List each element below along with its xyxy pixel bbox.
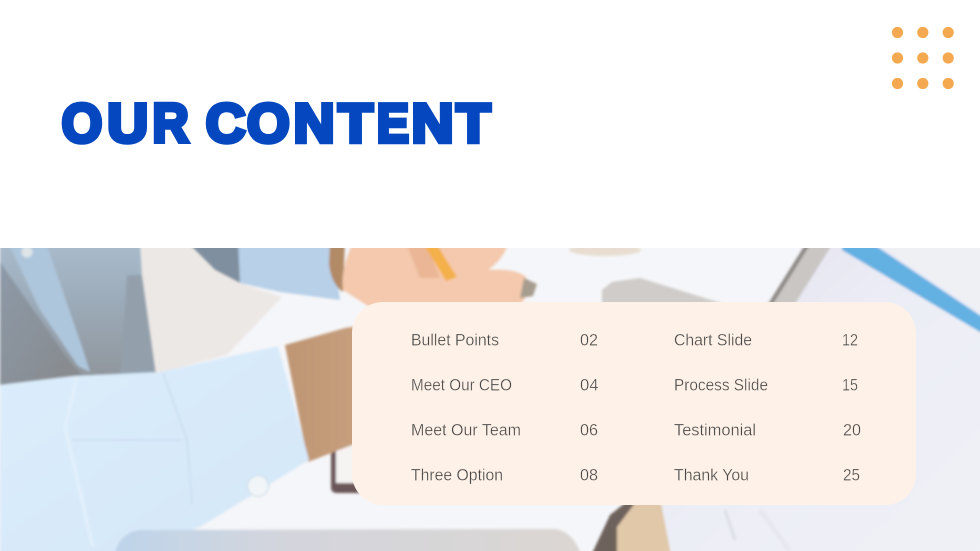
panel: contents list (352, 302, 916, 505)
column: right entries: Thank You (674, 466, 749, 484)
photo: hands at a desk (0, 240, 980, 551)
column: left entries (411, 332, 598, 484)
title: R (152, 93, 189, 154)
title: O (247, 92, 290, 154)
title: T (456, 92, 491, 154)
title: O (62, 93, 102, 154)
column: right entries (674, 332, 861, 484)
column: left entries: 04 (580, 376, 598, 394)
column: left entries: 08 (580, 466, 598, 484)
column: left entries: Bullet Points (411, 332, 499, 350)
title: N (412, 93, 454, 154)
title: N (294, 92, 335, 154)
column: right entries: 20 (843, 422, 861, 440)
column: right entries: Process Slide (674, 376, 768, 394)
column: left entries: 06 (580, 422, 598, 440)
column: right entries: 15 (842, 376, 858, 394)
column: left entries: Meet Our CEO (411, 376, 512, 394)
column: left entries: Three Option (411, 466, 503, 484)
title (62, 92, 491, 154)
column: right entries: 12 (842, 332, 858, 350)
icon: orange dot grid (892, 27, 954, 89)
title: C (206, 92, 245, 154)
column: left entries: 02 (580, 332, 598, 350)
title: T (338, 92, 373, 154)
column: right entries: Testimonial (674, 422, 756, 440)
column: left entries: Meet Our Team (411, 422, 521, 440)
column: right entries: Chart Slide (674, 332, 752, 350)
title: U (107, 92, 148, 154)
title: E (377, 92, 409, 153)
column: right entries: 25 (843, 466, 860, 484)
